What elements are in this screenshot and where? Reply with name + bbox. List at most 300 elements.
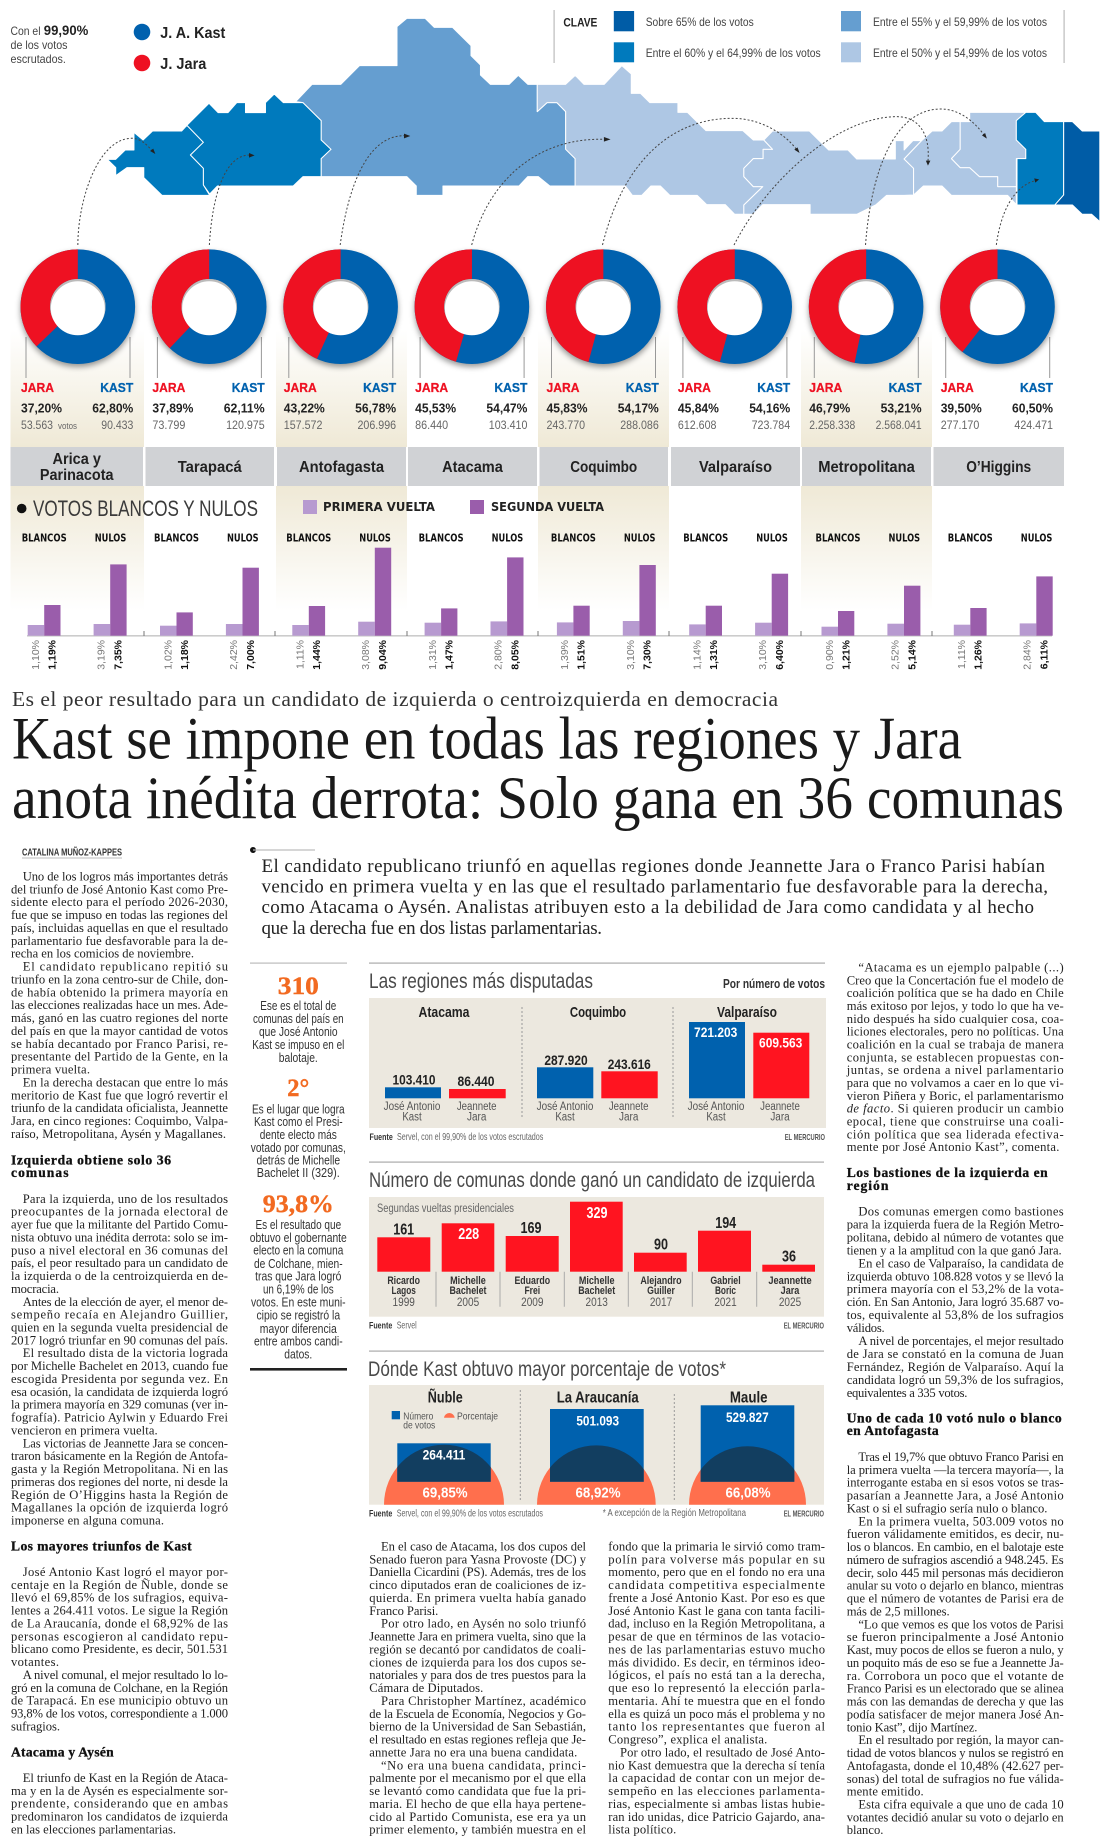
sidebar: 93,8%: tras que Jara logró xyxy=(255,1268,341,1284)
sidebar: 310: que José Antonio xyxy=(259,1024,338,1039)
chart: Número de comunas donde ganó un candidato de izquierda: Michelle xyxy=(579,1275,615,1287)
left column article: fourth block: prendente, considerando que en ambas xyxy=(11,1797,228,1811)
left column article: first block: recha en los comicios de noviembre. xyxy=(11,947,194,961)
subheading: Uno de cada 10 votó nulo o blanco en Antofagasta: en Antofagasta xyxy=(847,1423,939,1438)
region name bars: Atacama xyxy=(442,459,503,476)
chart: Dónde Kast obtuvo mayor porcentaje de votos: Porcentaje xyxy=(457,1410,498,1422)
sidebar rule xyxy=(250,962,347,964)
left column article: second block: El resultado dista de la victoria lograda xyxy=(23,1346,228,1360)
region column: Metropolitana: JARA xyxy=(809,380,843,395)
left column article: fourth block: en las elecciones parlamentarias. xyxy=(11,1822,176,1836)
right column article: third block: sonas) del total de sufragios no fue válida- xyxy=(847,1772,1064,1786)
centre article column B: polín para volverse más popular en su xyxy=(608,1552,826,1566)
blank and null bars: Coquimbo: 1,51% xyxy=(576,639,588,670)
clave legend: Entre el 55% y el 59,99% de los votos xyxy=(873,15,1047,29)
chart: Dónde Kast obtuvo mayor porcentaje de votos: * A excepción de la Región Metropolitana xyxy=(603,1508,746,1519)
blank and null bars: O'Higgins: 2,84% xyxy=(1022,640,1034,670)
centre article column B: ran ido unidas, dice Patricio Gajardo, ana- xyxy=(608,1810,825,1824)
left column article: third block: A nivel comunal, el mejor resultado lo lo- xyxy=(23,1668,228,1682)
region column: Atacama: 86.440 xyxy=(415,418,448,432)
right column article: third block: En el resultado por región, la mayor can- xyxy=(858,1733,1064,1747)
left column article: second block: nista obtuvo una inédita derrota: solo se im- xyxy=(11,1230,228,1244)
sidebar: 93,8% xyxy=(250,1191,347,1362)
left column article: first block: triunfo de la candidata oficialista, Jeannette xyxy=(11,1101,228,1115)
region column: Valparaíso: 723.784 xyxy=(752,418,790,432)
chart: Número de comunas donde ganó un candidato de izquierda: Fuente xyxy=(369,1320,392,1332)
left column article: second block: imponerse en alguna comuna. xyxy=(11,1514,164,1528)
blank and null bars: Metropolitana: 2,52% xyxy=(889,640,901,670)
region column: Antofagasta: 157.572 xyxy=(284,418,323,432)
axis of blank and null bars xyxy=(27,631,1052,637)
right column article: second block: tos, equivalente al 53,8% de los sufragios xyxy=(847,1308,1064,1322)
blank and null bars: Valparaíso: 1,31% xyxy=(708,639,720,670)
right column article: first block: para que no volvamos a caer en lo que vi- xyxy=(847,1076,1064,1090)
centre article column B xyxy=(608,1540,826,1837)
left column article: third block: de La Araucanía, donde el 68,92% de las xyxy=(11,1616,228,1630)
left column article: first block: Uno de los logros más importantes detrás xyxy=(23,870,228,884)
right column article: third block: ra. Corrobora un poco que el votante de xyxy=(847,1669,1064,1683)
right column article: third block: mente emitido. xyxy=(847,1785,924,1799)
chart: Número de comunas donde ganó un candidato de izquierda: Jeannette xyxy=(768,1275,812,1287)
region column: Tarapacá xyxy=(149,247,269,432)
blank and null bars: Coquimbo: 3,10% xyxy=(625,640,637,670)
region column: Atacama: JARA xyxy=(415,380,449,395)
chart: Las regiones más disputadas: 86.440 xyxy=(458,1073,495,1089)
centre article column B: dad, incluso en la Región Metropolitana, a xyxy=(608,1617,825,1631)
region column: Antofagasta: 43,22% xyxy=(284,400,325,416)
left column article: second block: Antes de la elección de ayer, el menor de- xyxy=(23,1295,228,1309)
blank and null votes heading: VOTOS BLANCOS Y NULOS xyxy=(33,496,258,521)
sidebar: 310: Kast se impuso en el xyxy=(252,1037,344,1052)
chart: Las regiones más disputadas: Jara xyxy=(467,1112,487,1124)
centre article column B: Por otro lado, el resultado de José Anto- xyxy=(620,1745,825,1759)
candidate legend xyxy=(134,24,226,73)
sidebar: 93,8%: obtuvo el gobernante xyxy=(250,1230,347,1245)
chart: Dónde Kast obtuvo mayor porcentaje de votos: Dónde Kast obtuvo mayor porcentaje de votos* xyxy=(368,1358,726,1381)
subheading: Uno de cada 10 votó nulo o blanco en Antofagasta xyxy=(847,1410,1062,1438)
centre article column A: Daniella Cicardini (PS). Además, tres de los xyxy=(369,1565,586,1579)
right column article: third block: Franco Parisi es un electorado que se alinea xyxy=(847,1682,1064,1696)
chart: Las regiones más disputadas: Coquimbo xyxy=(570,1004,626,1021)
left column article: second block: Región de O’Higgins hasta la Región de xyxy=(11,1488,228,1502)
blank and null bars: Arica y Parinacota: BLANCOS xyxy=(22,532,67,544)
region column: Arica y Parinacota: votos xyxy=(58,421,77,431)
right column article: third block: pasarían a Jeannette Jara, a José Antonio xyxy=(847,1489,1064,1503)
centre article column B: frente a José Antonio Kast. Por eso es que xyxy=(608,1591,825,1605)
blank and null bars: Metropolitana: BLANCOS xyxy=(815,532,860,544)
centre article column B: momento, pero que en el fondo no era una xyxy=(608,1565,825,1579)
right column article: third block: votantes decidió anular su voto o dejarlo en xyxy=(847,1810,1064,1824)
chart: Número de comunas donde ganó un candidato de izquierda: Número de comunas donde ganó un candidato de izquierda xyxy=(369,1169,815,1192)
sidebar: 310: balotaje. xyxy=(279,1050,318,1065)
chart: Número de comunas donde ganó un candidato de izquierda: 194 xyxy=(715,1215,736,1232)
right column article: second block: izquierda obtuvo 108.828 votos y se llevó la xyxy=(847,1269,1064,1283)
subheading: Los bastiones de la izquierda en región xyxy=(847,1165,1048,1193)
region column: Tarapacá: 73.799 xyxy=(152,418,186,432)
chart: Las regiones más disputadas: Valparaíso xyxy=(717,1004,777,1021)
chart: Dónde Kast obtuvo mayor porcentaje de votos: La Araucanía xyxy=(557,1390,639,1406)
centre article column B: Congreso”, explica el analista. xyxy=(608,1733,767,1747)
left column article: second block: quien en la segunda vuelta presidencial de xyxy=(11,1321,228,1335)
blank and null bars: O'Higgins: NULOS xyxy=(1021,532,1052,544)
right column article: third block: Esta cifra equivale a que uno de cada 10 xyxy=(858,1797,1064,1811)
region column: Antofagasta xyxy=(284,250,397,432)
chart: Las regiones más disputadas: Jara xyxy=(770,1112,790,1124)
blank and null bars: Antofagasta: NULOS xyxy=(359,532,391,544)
sidebar: 93,8%: datos. xyxy=(284,1346,312,1362)
right column article: third block: decir, solo 445 mil personas más decidieron xyxy=(847,1566,1064,1580)
chart: Las regiones más disputadas: Kast xyxy=(402,1112,422,1124)
chart: Número de comunas donde ganó un candidato de izquierda: 2013 xyxy=(586,1297,608,1309)
blank and null bars: Metropolitana: 5,14% xyxy=(906,639,918,670)
chart: Las regiones más disputadas: Kast xyxy=(555,1112,575,1124)
region column: O'Higgins xyxy=(938,247,1057,432)
headline xyxy=(12,706,1064,831)
left column article: second block: fografía). Patricio Aylwin y Eduardo Frei xyxy=(11,1411,228,1425)
chart: Número de comunas donde ganó un candidato de izquierda: Alejandro xyxy=(640,1275,682,1287)
left column article: fourth block xyxy=(11,1771,228,1836)
centre article column B: nio Kast demuestra que la derecha sí tenía xyxy=(608,1758,825,1772)
right column article: first block: nido después ha sido cualquier cosa, coa- xyxy=(847,1012,1064,1026)
chart: Las regiones más disputadas: Las regiones más disputadas xyxy=(369,970,593,993)
right column article: third block: se fueron principalmente a José Antonio xyxy=(847,1630,1064,1644)
left column article: second block: 2017 logró triunfar en 90 comunas del país. xyxy=(11,1333,228,1347)
intro deck: que la derecha fue en dos listas parlamentarias. xyxy=(262,918,602,939)
chart: Las regiones más disputadas: Fuente xyxy=(370,1132,393,1143)
left column article: second block: traron básicamente en la Región de Antofa- xyxy=(11,1449,228,1463)
blank and null bars: Atacama: 2,80% xyxy=(492,640,504,670)
right column article: second block: ción. En San Antonio, Jara logró 35.687 vo- xyxy=(847,1295,1064,1309)
sidebar: 93,8%: entre ambos candi- xyxy=(254,1334,343,1348)
blank and null bars: Antofagasta: 1,11% xyxy=(295,640,307,669)
subheading: Uno de cada 10 votó nulo o blanco en Antofagasta: Uno de cada 10 votó nulo o blanco xyxy=(847,1410,1062,1426)
blank and null bars: Valparaíso: BLANCOS xyxy=(683,532,728,544)
chart: Las regiones más disputadas: José Antonio xyxy=(537,1101,593,1113)
region column: Metropolitana: 46,79% xyxy=(809,400,851,416)
region column: O'Higgins: 424.471 xyxy=(1014,418,1053,432)
left column article: third block: gró en la comuna de Colchane, en la Región xyxy=(11,1681,229,1695)
region column: O'Higgins: JARA xyxy=(941,380,974,395)
right column article: third block: los o blancos. En cambio, en el balotaje este xyxy=(847,1540,1064,1554)
region column: Metropolitana: 2.568.041 xyxy=(876,418,922,432)
centre article column A: annette Jara no era una buena candidata. xyxy=(369,1745,577,1759)
right column article: second block: A nivel de porcentajes, el mejor resultado xyxy=(858,1334,1064,1348)
centre article column B: José Antonio Kast le gana con tanta facili- xyxy=(608,1604,825,1618)
blank and null bars: Atacama: 8,05% xyxy=(509,639,521,670)
blank and null bars: Antofagasta xyxy=(286,532,391,670)
intro deck: El candidato republicano triunfó en aquellas regiones donde Jeannette Jara o Franco Parisi habían xyxy=(262,856,1046,877)
chart: Número de comunas donde ganó un candidato de izquierda: 161 xyxy=(393,1222,414,1238)
subheading: Los bastiones de la izquierda en región: Los bastiones de la izquierda en xyxy=(847,1165,1048,1180)
region column: Arica y Parinacota: 37,20% xyxy=(21,400,62,416)
right column article: second block: En el caso de Valparaíso, la candidata de xyxy=(858,1256,1064,1270)
clave legend xyxy=(554,10,1065,63)
left column article: third block: sufragios. xyxy=(11,1719,60,1733)
chart: Las regiones más disputadas: Atacama xyxy=(418,1004,470,1021)
region name bars: Valparaíso xyxy=(699,459,772,476)
right column article: third block: más con las demandas de derecha y que las xyxy=(847,1695,1064,1709)
sidebar: 93,8%: electo en la comuna xyxy=(253,1242,344,1258)
blank and null bars: Arica y Parinacota: 1,19% xyxy=(46,639,58,670)
centre article column A: quierda. En primera vuelta había ganado xyxy=(369,1591,586,1605)
sidebar: 310: 310 xyxy=(278,973,319,1000)
blank and null bars: Atacama xyxy=(419,532,524,670)
chart: Número de comunas donde ganó un candidato de izquierda: Ricardo xyxy=(387,1275,420,1287)
left column article: first block: fue que se impuso en todas las regiones del xyxy=(11,908,228,922)
sidebar: 93,8%: cipio se registró la xyxy=(256,1308,341,1322)
chart: Número de comunas donde ganó un candidato de izquierda: 90 xyxy=(654,1236,668,1254)
subheading: Los bastiones de la izquierda en región: región xyxy=(847,1178,889,1193)
rounds legend: PRIMERA VUELTA xyxy=(323,499,435,514)
blank and null bars: Valparaíso xyxy=(683,532,788,670)
kicker: Es el peor resultado para un candidato de izquierda o centroizquierda en democracia xyxy=(12,687,778,711)
region column: Arica y Parinacota: 62,80% xyxy=(92,400,134,416)
scrutiny note: de los votos xyxy=(10,38,68,52)
left column article: third block: José Antonio Kast logró el mayor por- xyxy=(23,1565,228,1579)
right column article: third block: Antofagasta, donde el 10,48% (42.627 per- xyxy=(847,1759,1064,1773)
sidebar: 310: comunas del país en xyxy=(253,1011,344,1026)
chart: Las regiones más disputadas: 721.203 xyxy=(694,1024,738,1040)
chart: Número de comunas donde ganó un candidato de izquierda: Michelle xyxy=(450,1275,486,1287)
blank and null bars: Coquimbo xyxy=(551,532,656,670)
arrows from donuts to map regions xyxy=(78,109,1039,245)
right column article: third block: Tras el 19,7% que obtuvo Franco Parisi en xyxy=(858,1450,1064,1464)
right column article: third block: fueron válidamente emitidos, es decir, nu- xyxy=(847,1527,1064,1541)
sidebar: 93,8%: mayor diferencia xyxy=(260,1321,337,1336)
left column article: first block: En la derecha destacan que entre lo más xyxy=(23,1075,228,1089)
left column article: first block xyxy=(11,870,229,1141)
chart: Número de comunas donde ganó un candidato de izquierda: 2025 xyxy=(779,1297,801,1309)
centre article column B: fondo que la primaria le sirvió como tram- xyxy=(608,1540,825,1554)
region name bars: Coquimbo xyxy=(570,459,637,476)
chart: Número de comunas donde ganó un candidato de izquierda: 228 xyxy=(458,1226,479,1243)
chart: Número de comunas donde ganó un candidato de izquierda: EL MERCURIO xyxy=(784,1320,824,1330)
chart: Las regiones más disputadas: Servel, con el 99,90% de los votos escrutados xyxy=(397,1132,543,1143)
region column: Valparaíso: 612.608 xyxy=(678,418,717,432)
chart: Número de comunas donde ganó un candidato de izquierda: Bachelet xyxy=(450,1285,487,1297)
region column: Arica y Parinacota xyxy=(18,247,138,432)
region column: O'Higgins: 39,50% xyxy=(941,400,982,416)
right column article: first block: ción política que sea liderada efectiva- xyxy=(847,1127,1064,1141)
scrutiny note: Con el xyxy=(10,24,40,38)
sidebar: 310: Ese es el total de xyxy=(260,998,336,1013)
left column article: third block: llevó el 69,85% de los sufragios, equiva- xyxy=(11,1591,228,1605)
blank and null bars: Arica y Parinacota xyxy=(22,532,127,670)
region column: Metropolitana: 2.258.338 xyxy=(809,418,856,432)
blank and null bars: Atacama: NULOS xyxy=(492,532,523,544)
region column: Metropolitana xyxy=(809,257,922,432)
left column article: fourth block: El triunfo de Kast en la Región de Ataca- xyxy=(23,1771,228,1785)
centre article column A: Para Christopher Martínez, académico xyxy=(381,1694,586,1708)
region name bars: Arica y xyxy=(52,451,101,468)
centre article column A: ciones de izquierda para los dos cupos se- xyxy=(369,1655,586,1669)
chart: Las regiones más disputadas: Kast xyxy=(706,1112,726,1124)
right column article: first block: liciones electorales, pero no políticas. Una xyxy=(847,1025,1064,1039)
candidate legend: J. Jara xyxy=(160,56,206,73)
region column: Arica y Parinacota: JARA xyxy=(21,380,55,395)
chart: Las regiones más disputadas: 609.563 xyxy=(759,1034,803,1050)
left column article: second block: mocracia. xyxy=(11,1282,59,1296)
scrutiny note xyxy=(10,22,89,66)
centre article column A: Jeannette Jara en primera vuelta, sino que la xyxy=(369,1630,586,1644)
left column article: second block: esa ocasión, la candidata de izquierda logró xyxy=(11,1385,228,1399)
chart: Dónde Kast obtuvo mayor porcentaje de votos: Servel, con el 99,90% de los votos escrutados xyxy=(397,1508,543,1520)
centre article column A: cinco diputados eran de coaliciones de iz- xyxy=(369,1578,586,1592)
centre article column B: lógicos, el país no está tan a la derecha, xyxy=(608,1668,825,1682)
chart: Número de comunas donde ganó un candidato de izquierda: 329 xyxy=(586,1205,608,1222)
map of Chile regions rotated xyxy=(107,18,1100,222)
region column: Valparaíso: 45,84% xyxy=(678,400,719,416)
right column article: first block: juntas, se ordena a nivel parlamentario xyxy=(846,1063,1064,1077)
chart: Número de comunas donde ganó un candidato de izquierda: Lagos xyxy=(392,1285,416,1297)
region column: Arica y Parinacota: 53.563 xyxy=(21,418,53,432)
chart: Las regiones más disputadas: Jeannete xyxy=(609,1101,649,1113)
subheading: Atacama y Aysén: Atacama y Aysén xyxy=(11,1744,114,1760)
centre article column B: que eso lo representó la elección parla- xyxy=(608,1681,825,1695)
chart: Dónde Kast obtuvo mayor porcentaje de votos: 69,85% xyxy=(422,1484,468,1502)
clave legend: Sobre 65% de los votos xyxy=(646,15,754,29)
chart: Dónde Kast obtuvo mayor porcentaje de votos: 501.093 xyxy=(576,1413,619,1429)
chart: Las regiones más disputadas: Por número de votos xyxy=(723,977,825,991)
chart: Número de comunas donde ganó un candidato de izquierda: Frei xyxy=(524,1285,540,1297)
blank and null bars: Tarapacá: 1,18% xyxy=(179,639,191,670)
left column article: third block: votantes. xyxy=(11,1655,59,1669)
right column article: third block: más de 2,5 millones. xyxy=(847,1604,950,1618)
centre article column A: natoriales y para dos de tres puestos para la xyxy=(369,1668,586,1682)
region column: Tarapacá: 37,89% xyxy=(152,400,194,416)
left column article: third block: 93,8% de los votos, correspondiente a 1.000 xyxy=(11,1707,228,1721)
right column article: third block: que el número de votantes de Parisi era de xyxy=(847,1592,1064,1606)
left column article: second block: ayer fue que la militante del Partido Comu- xyxy=(11,1218,228,1232)
subheading: Izquierda obtiene solo 36 comunas: comunas xyxy=(11,1165,68,1180)
chart: Dónde Kast obtuvo mayor porcentaje de votos xyxy=(369,1350,824,1518)
blank and null bars: Atacama: BLANCOS xyxy=(419,532,464,544)
right column article: second block: Fernández, Región de Valparaíso. Aquí la xyxy=(847,1360,1064,1374)
chart: Número de comunas donde ganó un candidato de izquierda xyxy=(369,1162,824,1332)
blank and null bars: Antofagasta: BLANCOS xyxy=(286,532,331,544)
right column article: second block: válidos. xyxy=(847,1321,885,1335)
right column article: third block: “Lo que vemos es que los votos de Parisi xyxy=(858,1617,1064,1631)
centre article column A: cido al Partido Comunista, ese era ya un xyxy=(369,1810,587,1824)
centre article column A: se levantó como candidata que fue la pri- xyxy=(369,1784,586,1798)
centre article column A: Por otro lado, en Aysén no solo triunfó xyxy=(381,1617,586,1631)
blank and null bars: Atacama: 1,31% xyxy=(427,640,439,670)
scrutiny note: 99,90% xyxy=(44,22,89,38)
centre article column B: sempeño en las elecciones parlamenta- xyxy=(608,1784,825,1798)
sidebar: 93,8%: 93,8% xyxy=(263,1191,334,1218)
right column article: first block: conjunta, se establecen propuestas con- xyxy=(847,1050,1064,1064)
left column article: second block: la izquierda o de la centroizquierda en de- xyxy=(11,1269,228,1283)
left column article: first block: se había decantado por Franco Parisi, re- xyxy=(11,1037,228,1051)
region name bars: Metropolitana xyxy=(818,459,915,476)
blank and null bars: O'Higgins: 1,26% xyxy=(973,639,985,670)
left column article: fourth block: ma y en la de Aysén es especialmente sor- xyxy=(11,1784,228,1798)
blank and null bars: Tarapacá xyxy=(154,532,259,670)
chart: Número de comunas donde ganó un candidato de izquierda: Eduardo xyxy=(514,1275,550,1287)
right column article: first block: vieron Piñera y Boric, el parlamentarismo xyxy=(847,1089,1064,1103)
left column article: second block: primeras dos regiones del norte, ni desde la xyxy=(11,1475,228,1489)
left column article: first block: presentante del Partido de la Gente, en la xyxy=(11,1050,228,1064)
right column article: third block xyxy=(847,1450,1064,1837)
blank and null bars: Antofagasta: 1,44% xyxy=(311,639,323,670)
left column article: second block: Para la izquierda, uno de los resultados xyxy=(23,1192,228,1206)
left column article: second block: puso a nivel electoral en 36 comunas del xyxy=(11,1243,228,1257)
left column article: second block: escogida Presidenta por segunda vez. En xyxy=(11,1372,229,1386)
left column article: first block: de había obtenido la primera mayoría en xyxy=(11,985,229,999)
region name bars: Tarapacá xyxy=(178,459,242,476)
left column article: first block: las elecciones realizadas hace un mes. Ade- xyxy=(11,998,228,1012)
right column article: second block: equivalentes a 335 votos. xyxy=(847,1386,967,1400)
left column article: third block: centaje en la Región de Ñuble, donde se xyxy=(11,1578,228,1592)
centre article column A xyxy=(369,1540,587,1837)
centre article column B: la capacidad de contar con un mejor de- xyxy=(608,1771,825,1785)
centre article column A: bierno de la Universidad de San Sebastián, xyxy=(369,1720,586,1734)
blank and null bars: O'Higgins xyxy=(948,532,1053,670)
byline xyxy=(22,846,122,858)
left column article: third block xyxy=(11,1565,229,1733)
region name bars: Parinacota xyxy=(40,467,114,484)
right column article: third block: En la primera vuelta, 503.009 votos no xyxy=(858,1514,1064,1528)
sidebar: 2°: detrás de Michelle xyxy=(256,1152,340,1168)
left column article: first block: raíso, Metropolitana, Aysén y Magallanes. xyxy=(11,1127,226,1141)
centre article column B: ella es quizá un poco más el problema y no xyxy=(608,1707,825,1721)
region column: Antofagasta: KAST xyxy=(363,380,396,395)
centre article column B: más dividido. Es decir, en términos ideo- xyxy=(608,1655,825,1669)
chart: Dónde Kast obtuvo mayor porcentaje de votos: de votos xyxy=(403,1420,435,1432)
cream background bands xyxy=(10,330,932,611)
byline: CATALINA MUÑOZ-KAPPES xyxy=(22,846,122,858)
centre article column B: lista político. xyxy=(608,1823,676,1837)
sidebar: 2°: Es el lugar que logra xyxy=(252,1102,345,1116)
left column article: third block: blicano como Presidente, es decir, 501.531 xyxy=(11,1642,228,1656)
right column article: third block: blanco. xyxy=(847,1823,883,1837)
region column: Metropolitana: KAST xyxy=(889,380,922,395)
left column article: second block: por Michelle Bachelet en 2013, cuando fue xyxy=(11,1359,228,1373)
sidebar: 310 xyxy=(252,973,344,1065)
blank and null bars: Antofagasta: 9,04% xyxy=(377,639,389,670)
right column article: first block: “Atacama es un ejemplo palpable (...) xyxy=(858,960,1064,974)
left column article: third block: lentes a 264.411 votos. Le sigue la Región xyxy=(11,1604,229,1618)
blank and null bars: Arica y Parinacota: NULOS xyxy=(95,532,126,544)
region column: Valparaíso xyxy=(678,255,791,432)
region name bars: O’Higgins xyxy=(966,459,1031,476)
chart: Dónde Kast obtuvo mayor porcentaje de votos: Fuente xyxy=(369,1508,392,1520)
blank and null bars: O'Higgins: BLANCOS xyxy=(948,532,993,544)
right column article: second block: para la izquierda fuera de la Región Metro- xyxy=(847,1217,1064,1231)
right column article: third block: interrogante estaba en si esos votos se tras- xyxy=(847,1476,1064,1490)
right column article: first block: coalición política que se ha dado en Chile xyxy=(847,986,1064,1000)
left column article: second block: sempeño recaía en Alejandro Guillier, xyxy=(11,1308,228,1322)
sidebar: 2°: Kast como el Presi- xyxy=(254,1114,343,1129)
blank and null bars: Valparaíso: 6,40% xyxy=(774,639,786,670)
region column: Coquimbo: 288.086 xyxy=(620,418,659,432)
left column article: second block: gasta y la Región Metropolitana. Ni en las xyxy=(11,1462,228,1476)
sidebar: 2°: dente electo más xyxy=(260,1127,337,1142)
right column article: first block: coalición en la cual se trabaja de manera xyxy=(847,1037,1064,1051)
left column article: first block: Jara, en cinco regiones: Coquimbo, Valpa- xyxy=(11,1114,228,1128)
left column article: second block: país, el peor resultado para un candidato de xyxy=(11,1256,228,1270)
left column article: first block: parlamentario fue desfavorable para la de- xyxy=(11,934,228,948)
chart: Dónde Kast obtuvo mayor porcentaje de votos: 68,92% xyxy=(576,1484,620,1502)
chart: Las regiones más disputadas xyxy=(369,962,826,1143)
centre article column A: el resultado en estas regiones refleja que Je- xyxy=(369,1733,586,1747)
sidebar: 2°: votado por comunas, xyxy=(251,1140,346,1155)
sidebar: 2° xyxy=(251,1075,346,1180)
blank and null bars: Metropolitana: 0,90% xyxy=(824,640,836,670)
blank and null bars: Arica y Parinacota: 7,35% xyxy=(112,639,124,670)
left column article: second block xyxy=(11,1192,229,1528)
right column article: third block: anular su voto o dejarlo en blanco, mientras xyxy=(847,1579,1064,1593)
